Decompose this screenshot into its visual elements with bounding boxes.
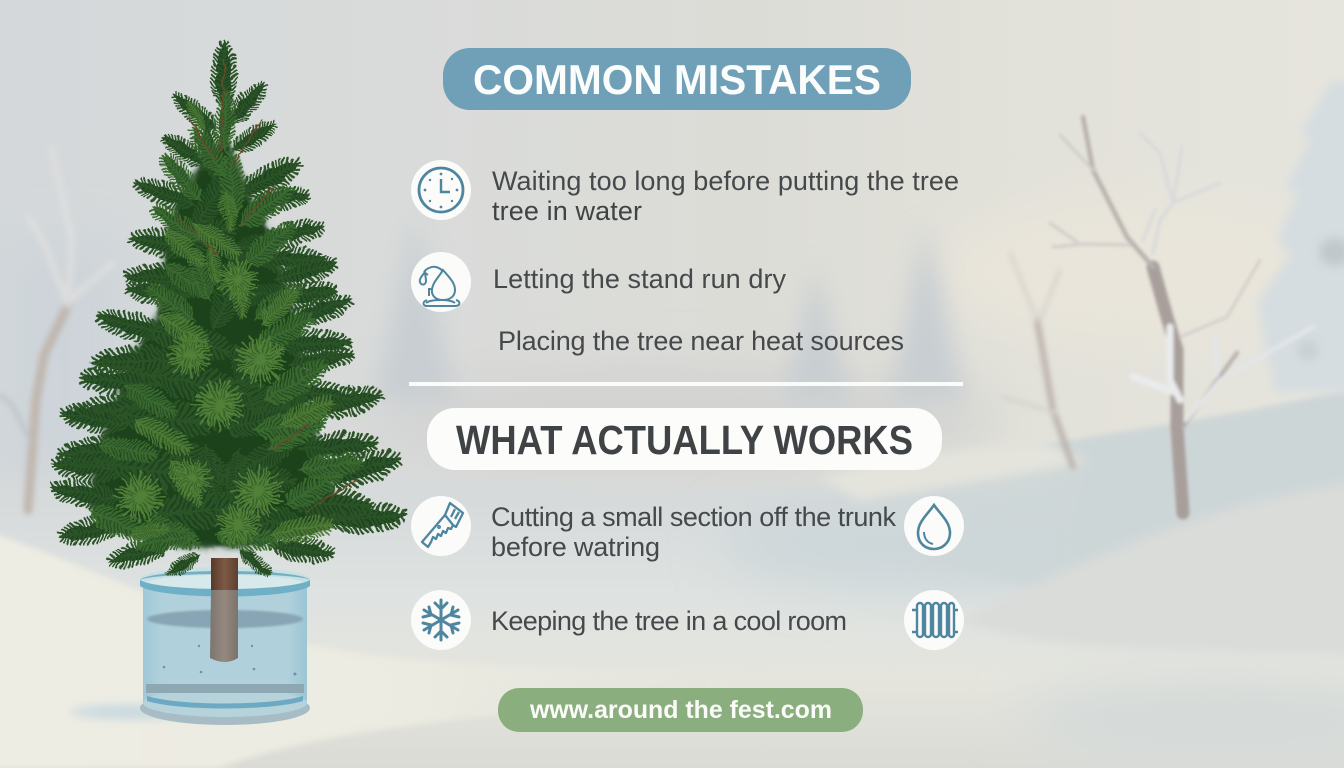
mistake 2: stand runs dry: Letting the stand run dry bbox=[493, 264, 786, 294]
solution 2: cool room: Keeping the tree in a cool room bbox=[491, 606, 847, 636]
mistake 2: stand runs dry bbox=[411, 252, 786, 312]
title: common mistakes: COMMON MISTAKES bbox=[473, 56, 881, 103]
icon: snowflake bbox=[411, 590, 471, 650]
icon: clock bbox=[411, 160, 471, 220]
icon: drying water drop bbox=[411, 252, 471, 312]
trunk bbox=[210, 558, 238, 662]
snow drifts bbox=[0, 380, 1344, 768]
panel: christmas tree in glass vase bbox=[46, 41, 408, 725]
tree foliage bbox=[46, 41, 408, 581]
icon: radiator bbox=[904, 590, 964, 650]
mistake 1: waiting too long bbox=[411, 160, 959, 226]
mistake 3: heat sources: Placing the tree near heat sources bbox=[498, 326, 904, 356]
solution 1: cut the trunk: before watring bbox=[491, 532, 660, 562]
solution 2: cool room bbox=[411, 590, 964, 650]
glass vase bbox=[140, 567, 310, 725]
blurred right pine bbox=[1258, 80, 1344, 392]
vase shadow bbox=[70, 705, 190, 719]
blurred bare tree, right bbox=[1050, 117, 1313, 513]
heading: what actually works bbox=[427, 408, 942, 470]
distant blurred pines bbox=[375, 215, 965, 400]
icon: water drop bbox=[904, 496, 964, 556]
divider bbox=[409, 382, 963, 386]
footer url pill bbox=[498, 688, 863, 732]
mistakes list bbox=[411, 160, 959, 356]
footer url pill: www.around the fest.com bbox=[529, 696, 832, 724]
blurred bare tree, left bbox=[0, 150, 113, 510]
solution 1: cut the trunk: Cutting a small section off the trunk bbox=[491, 502, 896, 532]
solutions list bbox=[411, 496, 964, 650]
icon: hand saw bbox=[411, 496, 471, 556]
title: common mistakes bbox=[443, 48, 911, 110]
blurred bare tree, middle bbox=[1003, 253, 1073, 467]
mistake 1: waiting too long: tree in water bbox=[492, 196, 642, 226]
heading: what actually works: WHAT ACTUALLY WORKS bbox=[456, 417, 913, 463]
solution 1: cut the trunk bbox=[411, 496, 964, 562]
mistake 1: waiting too long: Waiting too long before putting the tree bbox=[492, 166, 959, 196]
